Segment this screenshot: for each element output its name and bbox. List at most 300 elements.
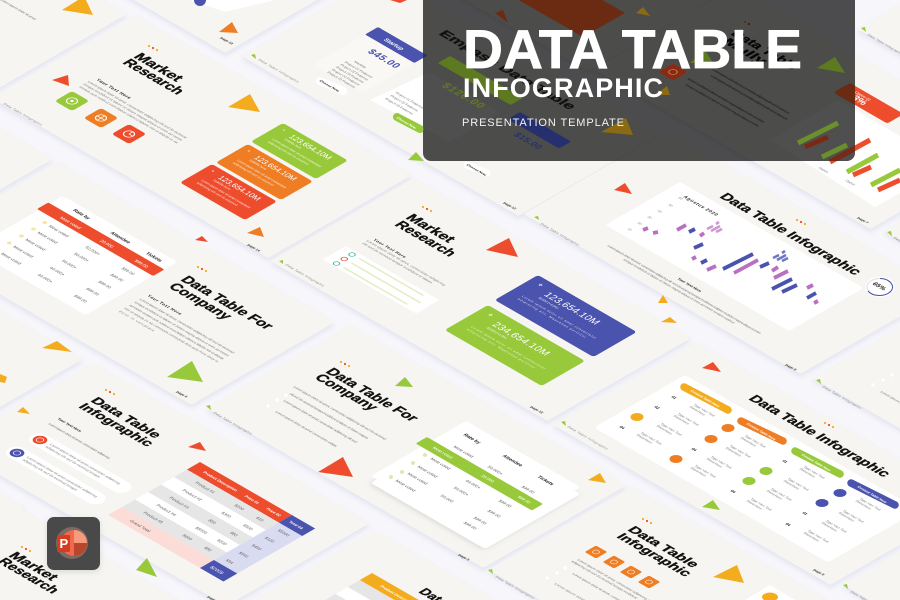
red tag [835,84,855,105]
card: orange: adipiscing elit sed do eiusmod [232,161,275,187]
cell text: Point Here [655,425,673,435]
features: Project 04 Features [330,68,361,86]
paragraph below chart: tempor incididunt ut labore et dolore magna aliqua ut enim ad minim veniam nostrud [622,258,736,324]
rows: Most voted [429,457,452,470]
product table: $2005 [208,565,225,576]
table rows: $540 [237,551,250,559]
title [613,524,703,579]
icon tiles [585,546,660,588]
product table: Price 01 [243,494,262,505]
page: page 9 [812,568,825,576]
title: Data Table Infographic [716,191,866,277]
cell text: Type Your Text [841,509,865,523]
features: Project 05 Features [326,71,357,89]
rows: $99.00 [109,273,125,282]
footers [821,33,900,600]
header row: 20,000 [480,474,496,483]
table rows: $450 [250,543,263,551]
column markers: 01 [801,511,810,516]
white button: Choose Now [465,163,488,176]
plan lines [384,91,425,115]
table rows: Product #4 [155,503,178,517]
slide: data table for company center [206,325,627,568]
rows: $99.00 [472,516,489,525]
header row [416,437,543,510]
title: Data Table [624,524,703,570]
cell text: Type Your Text [786,477,810,491]
accent dots [422,206,432,212]
cell text: Point Here [688,406,706,416]
cell text: Point Here [745,500,763,510]
rows: $99.00 [486,509,503,518]
gold triangle [713,565,744,583]
axis labels: 20 [636,221,643,225]
red bars [804,134,855,161]
table rows [324,573,459,600]
card: green: Lorem ipsum dolor sit amet consectetur [271,138,324,168]
gold triangle [601,118,633,135]
axis labels [817,165,857,188]
startup header: Startup [381,38,405,52]
green plan header [438,56,523,105]
option tag [834,83,900,124]
cell text: Type Your Text [693,464,717,478]
header row: Most voted [431,446,455,459]
card: green: Subtitle here [283,138,303,150]
cell text: Type Your Text [858,497,882,511]
cell text: Type Your Text [659,422,683,436]
table rows: $10 [255,516,266,522]
header row: $99.00 [516,495,533,504]
rows: 50,000+ [84,245,102,256]
card: green: $1000 (+4.8%) [485,326,508,340]
table rows: $120 [263,536,276,544]
progress ring [865,277,895,297]
product table [108,462,315,582]
option tag: Option 01 [853,90,873,102]
heading: infographic: INFOGRAPHIC [463,73,663,103]
pill: blue: adipiscing elit sed do eiusmod tempor [21,458,79,492]
title: Market [130,50,188,84]
column markers: 04 [729,489,738,494]
card: red [180,164,277,220]
red triangle top [390,0,407,3]
rows: Most voted [12,245,35,258]
footers: Data Table Infographic [821,385,863,410]
title: Research [391,218,461,259]
rows: 50,000+ [73,252,91,263]
table rows: $500 [242,523,255,531]
gold triangle [228,94,260,112]
cell text: Point Here [635,434,653,444]
red triangle [702,362,721,372]
cell text: Point Here [820,522,838,532]
startup header [365,27,427,63]
title: Data Table [87,395,165,440]
paragraph [118,298,235,366]
footer: Data Table Infographic [2,102,44,127]
chart heading: Agustus 2020 [681,195,720,217]
card: blue: Lorem ipsum dolor sit amet consectetur [521,295,599,340]
table rows: $50 [229,531,240,537]
cell text: Point Here [724,447,742,457]
cell text: Type Your Text [769,487,793,501]
slide: pricing [241,0,662,216]
page: page 15 [529,405,544,414]
back card layer [371,428,580,549]
stacked mini bars [707,222,788,261]
card: blue [495,275,637,357]
features: Monthly [353,60,367,69]
column markers: 01 [670,395,679,400]
card: green: 234,654.10M [489,321,552,358]
blue price: $15.00 [511,131,545,151]
rows: 40,000+ [36,273,55,284]
cell text: Type Your Text [806,529,830,543]
axis labels: 10 [626,227,633,231]
card: red: + [209,169,216,174]
cell text: Type Your Text [676,412,700,426]
green triangle [136,558,157,577]
gold triangle [588,473,606,483]
gold triangle [42,341,72,352]
rows: $99.00 [97,280,113,289]
card: blue: adipiscing elit. Maecenas porttitor [516,297,588,339]
table header [187,462,292,522]
page: page 5 [457,553,470,561]
accent dots [796,219,806,225]
rows: $99.00 [85,287,101,296]
card: red: 123,654.10M [215,174,263,202]
green triangle [167,361,203,382]
table rows: $300 [220,511,233,519]
footer: Data Table Infographic [539,222,581,247]
card: blue: + [535,281,547,289]
paragraph: veniam quis nostrud exercitation ullamco laboris nisi ut aliquip ex ea [78,85,179,144]
features: Project 03 Features [335,66,365,84]
green triangle [395,377,413,387]
paragraph: adipiscing elit sed do eiusmod tempor incididunt [570,560,638,600]
paragraph: Lorem ipsum dolor sit amet, consectetur adipiscing elit sed do eiusmod [138,298,235,354]
red triangle [188,442,206,451]
highlighted row text: $99.00 [133,259,150,269]
footer arrow [279,260,283,264]
pill: blue: Content Table Here [856,485,888,504]
highlighted row text [59,216,150,269]
product table: Product Description [202,470,240,492]
footer: Data Table Infographic [566,425,610,451]
rows: Most voted [24,238,47,251]
page: page 14 [246,243,261,252]
card: green: adipiscing elit sed do eiusmod [267,140,310,166]
accent dots [340,361,350,367]
card: red: adipiscing elit sed do eiusmod [196,181,239,207]
card: red: Lorem ipsum dolor sit amet consectetur [200,179,253,209]
accent dots [148,45,158,51]
pill: green: Content Table Here [800,453,832,472]
title: Data Table [727,28,803,72]
cell text: Point Here [854,500,872,510]
slide: data table infographic with product table [0,363,370,600]
rows: Most voted [36,231,60,244]
rows: Most voted [394,479,417,492]
rows: 50,000+ [60,259,79,270]
column headings [70,208,165,263]
slide: top partial with orange triangle [0,0,369,53]
rows: $99.00 [73,294,89,303]
rows: 40,000+ [464,479,483,490]
icon: orange tile [84,108,118,128]
column markers: 02 [653,405,662,410]
accent dots [105,389,115,395]
red triangle [486,238,518,257]
elements seen through the panel [423,0,855,161]
pill: red: Lorem ipsum dolor sit amet consectetur adipiscing [49,443,121,485]
card: blue: 123,654.10M [541,291,602,327]
slide: data table infographic bottom right [488,487,900,600]
gold circle [762,592,778,600]
cell text: Type Your Text [709,455,733,469]
table rows: $50 [203,546,214,552]
axis labels: 30 [646,215,653,219]
paragraph: tempor incididunt ut labore et dolore magna aliqua ut enim ad minim [82,83,183,142]
column markers [618,395,846,527]
dark title panel [423,0,855,161]
red triangle [614,183,632,194]
card: green: Lorem ipsum dolor sit amet consectetur [470,325,548,370]
paragraph: nisi ut aliquip ex ea commodo consequat duis aute irure dolor in [123,307,220,363]
card: green: adipiscing elit. Maecenas porttitor [465,328,537,369]
green triangle right [817,57,845,73]
pill: blue [851,483,895,505]
column markers: 01 [781,459,790,464]
subheading: Your Text Here [146,294,184,316]
icon: green tile [55,91,89,111]
table rows [128,481,292,575]
pill: orange: Content Table Here [745,422,777,441]
green triangle [702,500,720,510]
column headings [461,433,555,487]
paragraph: Lorem ipsum dolor sit amet, consectetur adipiscing [47,422,111,460]
slide: data table for company left [0,162,335,405]
choose button: Choose Now [318,79,341,92]
heading: data table: DATA TABLE [463,18,802,80]
red icon [660,64,686,80]
slide: bottom center with gold table [231,530,652,600]
cell text: Point Here [837,512,855,522]
accent dots [824,422,834,428]
features: Project 02 Features [339,63,370,81]
rows: 50,000+ [452,486,471,497]
axis labels: Option [817,166,830,174]
card: orange: Lorem ipsum dolor sit amet consectetur [236,159,289,189]
page: page 10 [219,36,234,45]
bullet text [553,572,635,600]
cell text: Point Here [672,415,690,425]
table rows: $200 [233,503,246,511]
highlighted row text: 20,000 [99,239,115,249]
white plan card [370,72,500,142]
card: blue: $1000 (+4.8%) [537,296,560,310]
green button edge [423,126,424,132]
pill: blue [2,444,110,507]
blue plan header [508,112,571,148]
slide: left middle [0,199,83,590]
paragraph [684,68,791,128]
rows: Most voted [0,252,23,265]
product table: Total 03 [287,520,305,530]
cell text: Point Here [802,532,820,542]
table rows: Product #1 [194,481,217,494]
cell text: Type Your Text [692,403,716,417]
total cell [200,560,237,582]
rows: 50,000 [439,494,456,503]
footer arrow [561,421,566,426]
white chart card [770,100,900,207]
red triangle [318,457,353,477]
cell text [635,403,882,545]
title: Infographic [75,401,158,449]
pill: red [25,431,136,495]
pill: red: adipiscing elit sed do eiusmod tempor [44,445,102,479]
green button: Choose Now [395,116,418,129]
title: Company [311,371,383,413]
title: Data Table Infographic [745,393,895,479]
title: Market [402,211,460,245]
cell text: Point Here [739,437,757,447]
page: page 8 [784,363,797,371]
cell text: Type Your Text [749,497,773,511]
column headings: Attendee [500,454,524,468]
column markers: 04 [784,522,793,527]
pill: gold [684,387,728,410]
accent dots [744,21,750,25]
rows: Most voted [452,445,475,458]
accent dots [642,518,652,524]
icon: red tile [112,124,146,144]
axis labels: 50 [667,203,674,207]
white chart card [606,182,864,331]
subheading: Your Text Here [676,277,702,293]
gold triangle 2 [661,317,677,323]
column headings: Tickets [535,475,555,487]
footer: Data Table Infographic [212,411,254,436]
rows: 40,000+ [48,266,67,277]
red small triangle [195,236,208,242]
column headings: Attendee [108,231,132,245]
slide: bar chart with option tag [593,0,900,229]
table rows: $50 [207,518,218,525]
red triangle [495,10,508,23]
paragraph below chart: Lorem ipsum dolor sit amet, consectetur adipiscing elit, sed do eiusmod tempor incididunt ut labore et dolore magna aliqua ut enim [606,244,762,335]
white card tip [735,585,805,600]
cell text: Type Your Text [824,519,848,533]
price: $45.00 [364,48,403,70]
column markers: 04 [618,425,627,430]
paragraph: tempor incididunt ut labore et dolore magna aliqua ut enim ad minim [133,301,230,357]
rows: $99.00 [497,499,514,508]
rows card [323,246,440,314]
white table card [371,421,580,542]
card: green: + [280,128,287,133]
title: Data Table For [322,365,423,424]
title: Mully [719,36,772,67]
paragraph: tempor incididunt ut labore et dolore magna aliqua ut enim ad minim [686,77,766,124]
cell text: Point Here [798,468,816,478]
rows: Most voted [406,472,429,485]
column headings: Rate by [71,208,92,221]
paragraph: elit sed do eiusmod tempor incididunt ut labore et dolore magna [288,392,370,440]
table rows: $54 [224,558,235,565]
orange triangle [247,227,264,237]
gold triangle small [660,86,670,95]
title: Market [5,549,63,583]
card: red: Subtitle here [212,179,232,191]
footer: Data Table Infographic [494,575,536,600]
cell text: Type Your Text [728,444,752,458]
icon: powerpoint [47,517,100,570]
rows: Most voted [47,224,71,238]
footer arrow [206,405,211,410]
pill: gold: Content Table Here [689,389,721,408]
card: green [251,123,348,179]
table rows: $200 [216,538,229,546]
header row [37,202,164,276]
cell text: Type Your Text [743,434,767,448]
gold triangle [658,295,668,303]
plan lines: Project 01 Features [394,91,425,109]
footer: Data Table Infographic [284,263,326,288]
axis labels: 40 [656,209,663,213]
green triangle middle [690,52,712,63]
paragraph: elit sed do eiusmod tempor incididunt ut labore [361,242,434,284]
blurred title: Empass Data Table [435,28,580,112]
slides: right edge [812,0,900,600]
paragraph: dolor in voluptate [118,310,156,332]
axis labels: 60 [677,196,684,200]
pill: green [795,451,840,474]
progress ring: 65% [870,281,888,292]
red triangle [52,75,69,86]
red card [519,0,625,36]
plan lines: Project 03 Features [384,97,414,115]
white table card [0,195,177,315]
rows [0,220,137,303]
paragraph: Lorem ipsum dolor sit amet consectetur adipiscing elit sed [282,399,358,444]
column headings: Rate by [461,433,482,445]
card: orange [216,144,313,200]
orange triangle [219,22,238,33]
column headings: Tickets [144,251,164,263]
paragraph: Lorem ipsum dolor sit amet consectetur adipis [274,410,338,448]
title [75,395,165,449]
bullet dots [266,393,288,408]
slide: market research with three cards [0,15,412,258]
card: orange: 123,654.10M [251,154,299,182]
title: Company [165,280,237,322]
paragraph: Lorem ipsum dolor sit amet, consectetur adipiscing elit sed do eiusmod [709,74,789,120]
green price: $120.00 [438,81,488,110]
paragraph: Lorem ipsum dolor sit amet, consectetur adipiscing elit sed do eiusmod [292,385,387,441]
table rows: Product #5 [142,511,165,524]
page: page 12 [502,201,517,210]
paragraph: Lorem ipsum dolor sit amet, consectetur adipiscing elit sed do eiusmod [86,80,188,139]
paragraph: tempor incididunt ut labore et dolore magna aliqua ut enim [684,83,760,128]
slide: data table infographic columns [553,342,900,585]
blue dot [194,0,206,6]
page: page 6 [175,390,188,398]
table rows: Product #2 [181,488,204,502]
